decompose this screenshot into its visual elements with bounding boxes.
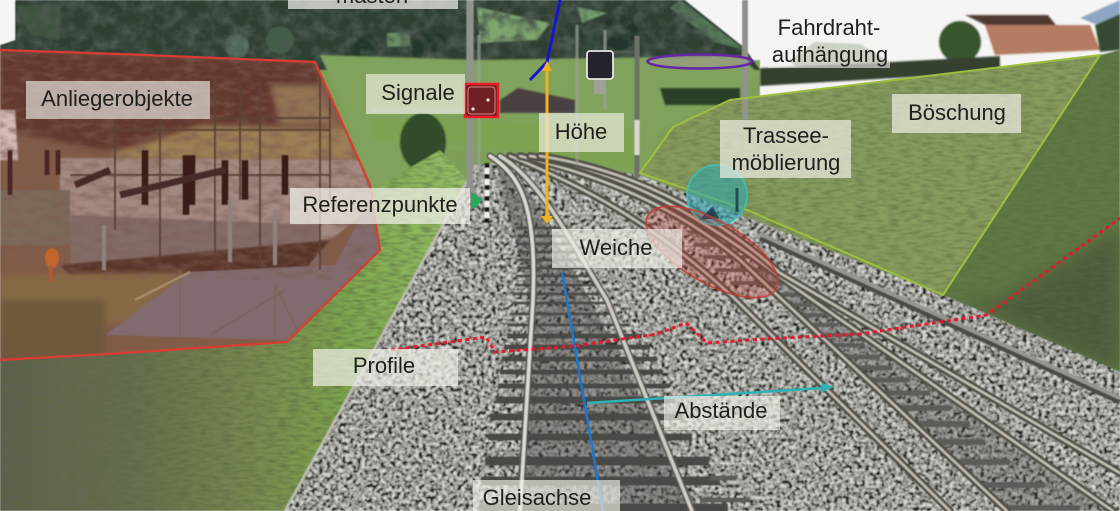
label: Fahrdraht-aufhängung: aufhängung	[772, 42, 888, 67]
label: Gleisachse	[473, 480, 620, 511]
steel frames	[10, 70, 330, 340]
label: Trassee-möblierung: möblierung	[732, 150, 840, 175]
signal: highlighted in red	[465, 84, 498, 117]
masts	[470, 0, 745, 223]
signal: black with white frame	[587, 51, 613, 94]
label: Höhe: Höhe	[555, 119, 607, 144]
label: Anliegerobjekte	[26, 81, 210, 119]
profile line: red dotted	[391, 218, 1120, 352]
label: Referenzpunkte	[290, 188, 470, 224]
contact wire suspension ellipse	[648, 54, 752, 68]
label: Referenzpunkte: Referenzpunkte	[302, 192, 458, 217]
label: Fahrdraht-aufhängung: Fahrdraht-	[778, 15, 880, 40]
ballast	[286, 162, 1120, 511]
label: Trassee-möblierung: Trassee-	[743, 123, 829, 148]
cable trough	[760, 238, 1120, 402]
switch ellipse	[632, 188, 792, 316]
forest backdrop	[0, 0, 760, 70]
label: Profile	[313, 349, 458, 386]
label: Signale: Signale	[381, 80, 455, 105]
region outline: Anliegerobjekte polygon	[0, 50, 380, 360]
label: Abstände	[664, 396, 780, 430]
label: Höhe	[539, 113, 624, 152]
label: Böschung: Böschung	[908, 100, 1006, 125]
meadow	[320, 55, 760, 190]
track axis line	[562, 272, 603, 511]
region outline: Böschung polygon	[640, 55, 1100, 295]
sleepers: main track	[479, 228, 728, 508]
track bed shading	[495, 160, 700, 511]
label: Profile: Profile	[353, 353, 415, 378]
height arrow	[541, 61, 553, 224]
label: Weiche	[552, 229, 682, 268]
label: Masten	[288, 0, 458, 9]
substation scene	[0, 50, 400, 360]
label: Fahrdraht-aufhängung	[768, 15, 890, 68]
bush	[400, 113, 446, 171]
reference point marker	[471, 192, 482, 208]
embankment	[640, 55, 1100, 295]
mast marker: dark blue line	[530, 0, 560, 80]
sleepers: diverging track	[690, 232, 1080, 508]
distance arrow	[587, 383, 834, 403]
label: Anliegerobjekte: Anliegerobjekte	[41, 86, 193, 111]
farmhouse	[500, 88, 575, 113]
label: Signale	[366, 74, 465, 114]
track furniture circle	[687, 165, 747, 225]
label: Gleisachse: Gleisachse	[483, 485, 591, 510]
label: Trassee-möblierung	[720, 120, 851, 178]
rails	[490, 156, 1120, 511]
sky details, mountain and farm	[760, 0, 1120, 86]
grass verge	[0, 150, 476, 511]
label: Abstände: Abstände	[675, 398, 767, 423]
label: Weiche: Weiche	[580, 235, 652, 260]
label: Böschung	[892, 94, 1021, 133]
